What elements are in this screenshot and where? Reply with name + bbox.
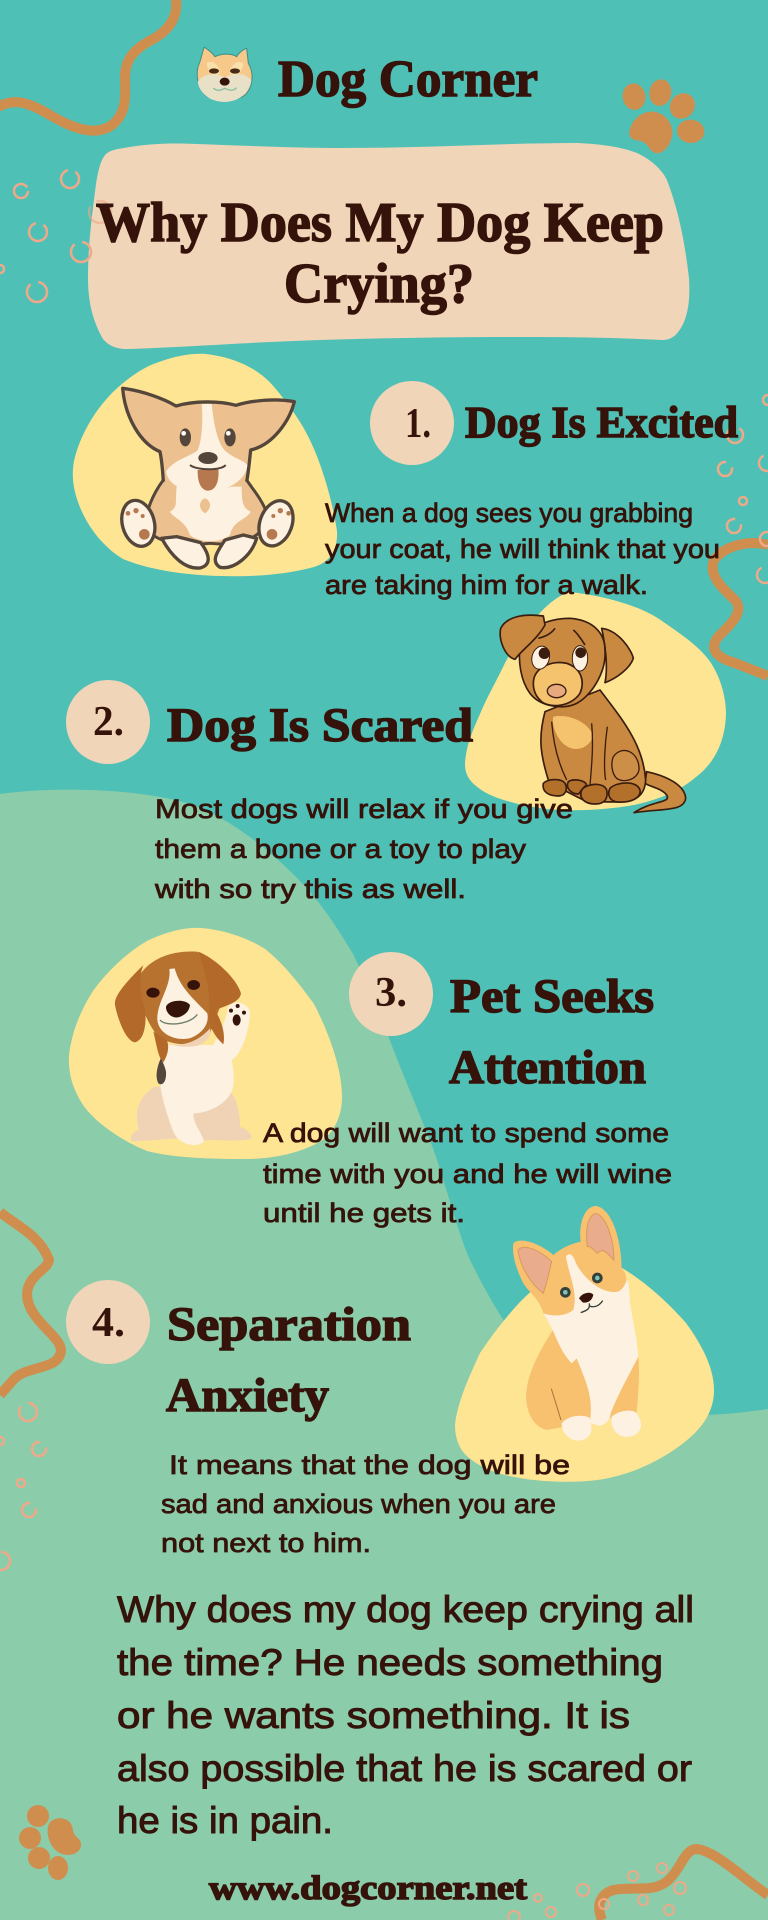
section 1 text (325, 498, 720, 600)
section 4 text (161, 1450, 570, 1558)
number badge 2 (66, 680, 150, 764)
section 3 text: until he gets it. (263, 1198, 465, 1228)
rings right (718, 395, 768, 583)
section 4 text: sad and anxious when you are (161, 1489, 556, 1519)
illustration: beagle puppy waving (115, 951, 252, 1145)
number badge 3 (349, 952, 433, 1036)
number badge 1 (370, 381, 454, 465)
rings upper left (0, 170, 111, 302)
section 3 number: 3. (375, 970, 407, 1016)
squiggle lower left (0, 1212, 61, 1395)
section 1 text: are taking him for a walk. (325, 570, 648, 600)
illustration: orange corgi (513, 1206, 641, 1441)
section 3 text (263, 1118, 672, 1228)
squiggle top left (0, 0, 176, 131)
section 4 text: not next to him. (161, 1528, 371, 1558)
closing paragraph: he is in pain. (117, 1800, 333, 1841)
section 1 heading: Dog Is Excited (465, 398, 738, 447)
yellow blob 4 (455, 1261, 714, 1482)
number badge 4 (66, 1280, 150, 1364)
closing paragraph: also possible that he is scared or (117, 1748, 692, 1789)
icon: shiba logo (197, 47, 252, 102)
icon: paw top right (621, 78, 705, 153)
section 3 heading: Pet Seeks (450, 970, 654, 1023)
section 3 heading: Attention (449, 1041, 646, 1094)
section 1 text: When a dog sees you grabbing (325, 498, 693, 528)
section 3 text: time with you and he will wine (263, 1159, 672, 1189)
yellow blob 3 (69, 928, 342, 1159)
rings bottom (508, 1863, 686, 1920)
closing paragraph: or he wants something. It is (117, 1695, 630, 1736)
green background shape (0, 790, 768, 1920)
section 4 text: It means that the dog will be (169, 1450, 570, 1480)
section 4 number: 4. (92, 1300, 125, 1346)
section 2 text: them a bone or a toy to play (155, 834, 527, 864)
closing paragraph (117, 1589, 694, 1841)
main title: Crying? (284, 253, 474, 315)
rings lower left (0, 1403, 46, 1570)
closing paragraph: the time? He needs something (117, 1642, 663, 1683)
yellow blob 2 (465, 592, 726, 810)
section 2 text: Most dogs will relax if you give (155, 794, 573, 824)
icon: paw bottom left (19, 1805, 81, 1880)
section 3 heading (449, 970, 654, 1094)
section 4 heading: Separation (167, 1298, 411, 1351)
website url: www.dogcorner.net (209, 1870, 528, 1907)
illustration: happy corgi (117, 388, 299, 568)
title panel (88, 143, 689, 349)
section 1 number: 1. (405, 401, 431, 447)
section 3 text: A dog will want to spend some (263, 1118, 669, 1148)
closing paragraph: Why does my dog keep crying all (117, 1589, 694, 1630)
section 2 number: 2. (93, 699, 124, 745)
main title (96, 192, 664, 315)
section 4 heading: Anxiety (166, 1369, 329, 1422)
main title: Why Does My Dog Keep (96, 192, 664, 254)
section 2 text (154, 794, 573, 904)
section 2 heading: Dog Is Scared (167, 699, 473, 752)
section 4 heading (166, 1298, 411, 1422)
section 1 text: your coat, he will think that you (325, 534, 720, 564)
yellow blob 1 (73, 354, 337, 576)
squiggle bottom right (599, 1849, 768, 1920)
brand name: Dog Corner (278, 51, 538, 108)
section 2 text: with so try this as well. (154, 874, 466, 904)
squiggle right (713, 543, 768, 676)
illustration: sad brown dog (500, 615, 686, 813)
